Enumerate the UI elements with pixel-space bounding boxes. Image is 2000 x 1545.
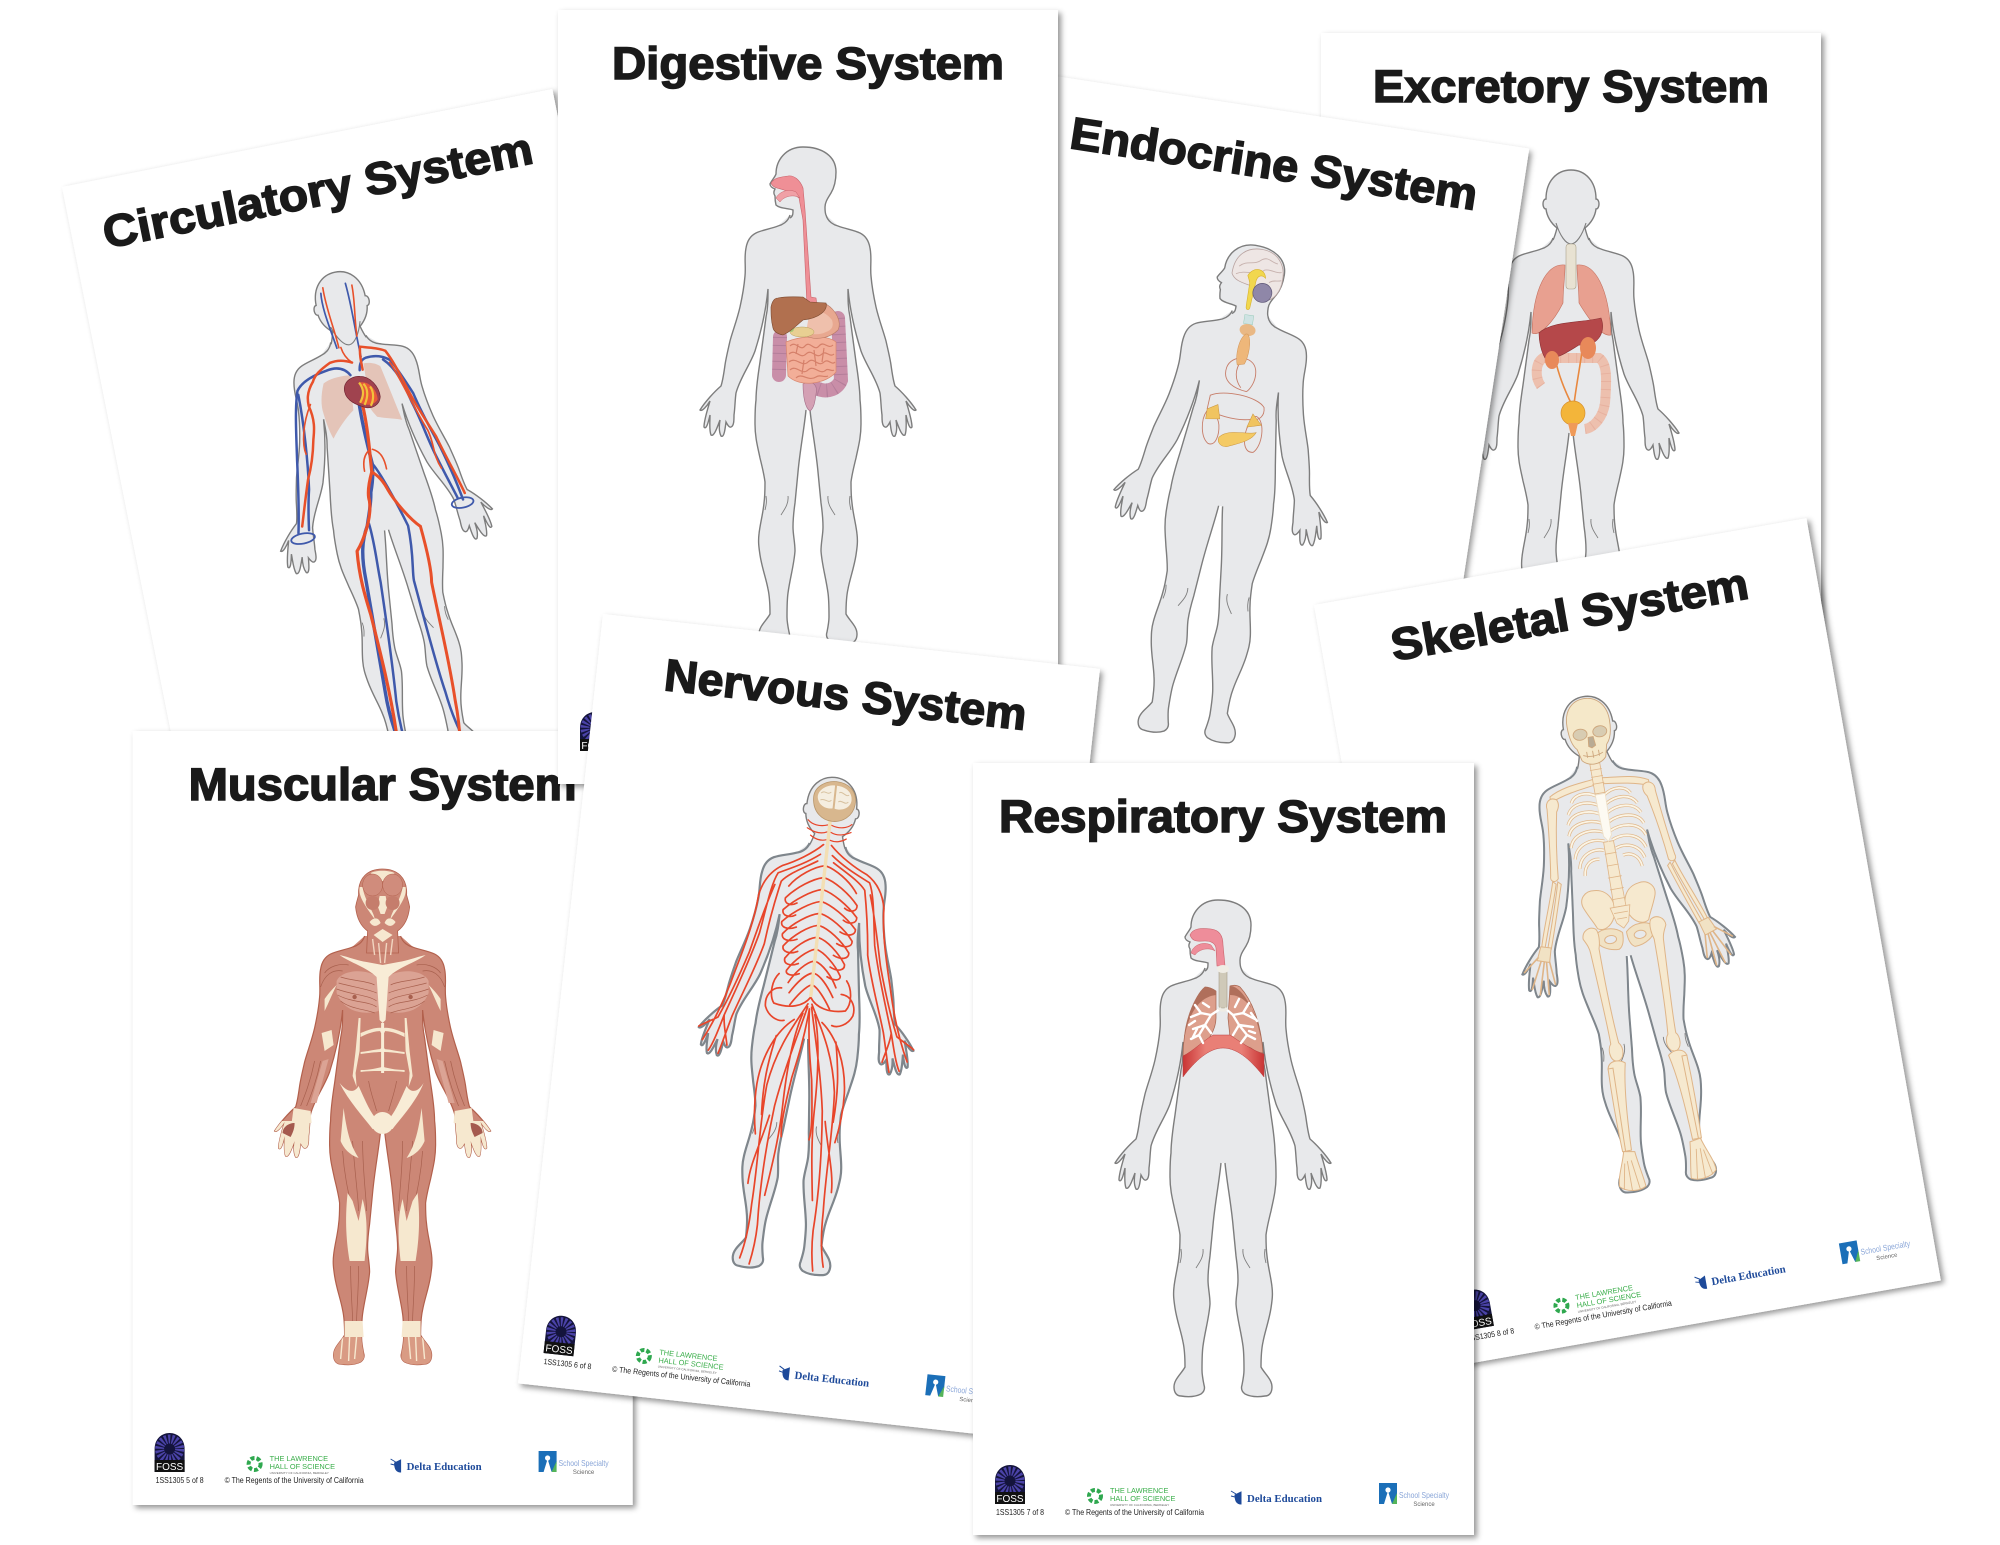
muscle: chest highlights (311, 971, 455, 1103)
footer: logos: HALL OF SCIENCE (1576, 1290, 1642, 1310)
organ: digestive tract (771, 176, 841, 411)
footer: logos: UNIVERSITY OF CALIFORNIA, BERKELEY (1110, 1503, 1169, 1507)
footer: logos: Science (1876, 1252, 1899, 1262)
footer: logos: HALL OF SCIENCE (270, 1462, 335, 1471)
footer: logos: 1SS1305 7 of 8 (996, 1508, 1044, 1517)
poster: respiratory system (973, 763, 1474, 1535)
footer: logos: Science (959, 1397, 981, 1405)
title: Digestive System: Digestive System (612, 38, 1004, 89)
title: Muscular System: Muscular System (189, 759, 577, 810)
bone: skull (1563, 695, 1617, 768)
footer: logos: © The Regents of the University of California (1065, 1508, 1204, 1517)
footer: logos: Delta Education (794, 1370, 870, 1390)
footer: logos: THE LAWRENCE (270, 1454, 328, 1463)
title: Circulatory System: Circulatory System (98, 123, 537, 258)
figure: circulatory body (229, 251, 538, 780)
footer: logos: Science (573, 1470, 595, 1476)
footer: logos: © The Regents of the University of California (612, 1365, 751, 1389)
logo: FOSS (543, 1314, 578, 1357)
title: Skeletal System: Skeletal System (1387, 558, 1752, 671)
logo: FOSS (995, 1465, 1025, 1505)
poster: muscular system (133, 731, 633, 1505)
footer: logos (155, 1433, 609, 1485)
figure: excretory body (1463, 170, 1679, 667)
icon: heart (342, 373, 382, 412)
footer: logos: THE LAWRENCE (1574, 1283, 1634, 1302)
footer: logos: HALL OF SCIENCE (1110, 1494, 1176, 1503)
figure: skeletal body (1477, 678, 1776, 1204)
figure: respiratory body (1115, 900, 1331, 1397)
footer: logos: THE LAWRENCE (659, 1348, 718, 1363)
figure: muscular body (267, 869, 499, 1367)
logo: FOSS: FOSS (996, 1494, 1024, 1505)
footer: logos (542, 1314, 1000, 1416)
organ: endocrine glands (1199, 244, 1289, 453)
logo: FOSS (155, 1433, 185, 1473)
figure: nervous body (673, 766, 942, 1283)
footer: logos: 1SS1305 8 of 8 (1466, 1326, 1515, 1344)
organ: spinal cord (811, 820, 830, 997)
poster: skeletal system (1314, 518, 1941, 1367)
poster: excretory system (1321, 33, 1821, 807)
title: Excretory System: Excretory System (1373, 61, 1769, 112)
footer: logos: © The Regents of the University of California (225, 1476, 364, 1485)
poster: endocrine system (918, 73, 1529, 914)
logo: FOSS: FOSS (156, 1462, 184, 1473)
footer: logos: Delta Education (1247, 1493, 1322, 1505)
logo: FOSS partial: FOSS (581, 741, 609, 752)
poster: digestive system (558, 10, 1058, 784)
poster: circulatory system (62, 89, 704, 946)
blood vessels: arteries (257, 268, 514, 770)
footer: logos: HALL OF SCIENCE (658, 1356, 724, 1372)
logo: FOSS: FOSS (1464, 1316, 1493, 1332)
figure: endocrine body (1079, 230, 1367, 753)
muscle: head and face (356, 869, 410, 963)
footer: logos: Delta Education (407, 1461, 482, 1473)
organ: respiratory tract and lungs (1183, 929, 1264, 1077)
logo: FOSS (1458, 1287, 1494, 1332)
bone: spine and sternum (1585, 762, 1634, 930)
footer: logos: School Specialty (946, 1383, 997, 1399)
organ: excretory organs (1532, 244, 1611, 436)
title: Nervous System: Nervous System (662, 649, 1029, 740)
logo: FOSS: FOSS (545, 1343, 573, 1357)
footer: logos: Delta Education (1711, 1263, 1787, 1288)
footer: logos: UNIVERSITY OF CALIFORNIA, BERKELEY (270, 1471, 329, 1475)
tendons: collar, sternum, groin (340, 955, 426, 1134)
footer: logos: 1SS1305 6 of 8 (543, 1357, 592, 1371)
footer: logos: 1SS1305 5 of 8 (156, 1476, 204, 1485)
organ: brain (811, 779, 857, 824)
footer: logos: UNIVERSITY OF CALIFORNIA, BERKELEY (658, 1365, 717, 1375)
footer: logos (1458, 1214, 1914, 1344)
footer: logos: School Specialty (1399, 1490, 1450, 1500)
footer: logos: THE LAWRENCE (1110, 1486, 1169, 1495)
footer: logos: Science (1413, 1502, 1435, 1508)
poster: nervous system (518, 614, 1100, 1438)
title: Respiratory System: Respiratory System (999, 791, 1447, 842)
footer: logos: School Specialty (559, 1458, 609, 1468)
footer: logos: UNIVERSITY OF CALIFORNIA, BERKELEY (1577, 1300, 1637, 1314)
logo: FOSS partial (580, 712, 610, 752)
title: Endocrine System: Endocrine System (1067, 107, 1481, 220)
blood vessels: veins (244, 267, 520, 769)
footer: logos (995, 1465, 1450, 1517)
footer: logos: © The Regents of the University of California (1534, 1298, 1673, 1332)
footer: logos: School Specialty (1860, 1238, 1911, 1257)
figure: digestive body (700, 147, 916, 644)
